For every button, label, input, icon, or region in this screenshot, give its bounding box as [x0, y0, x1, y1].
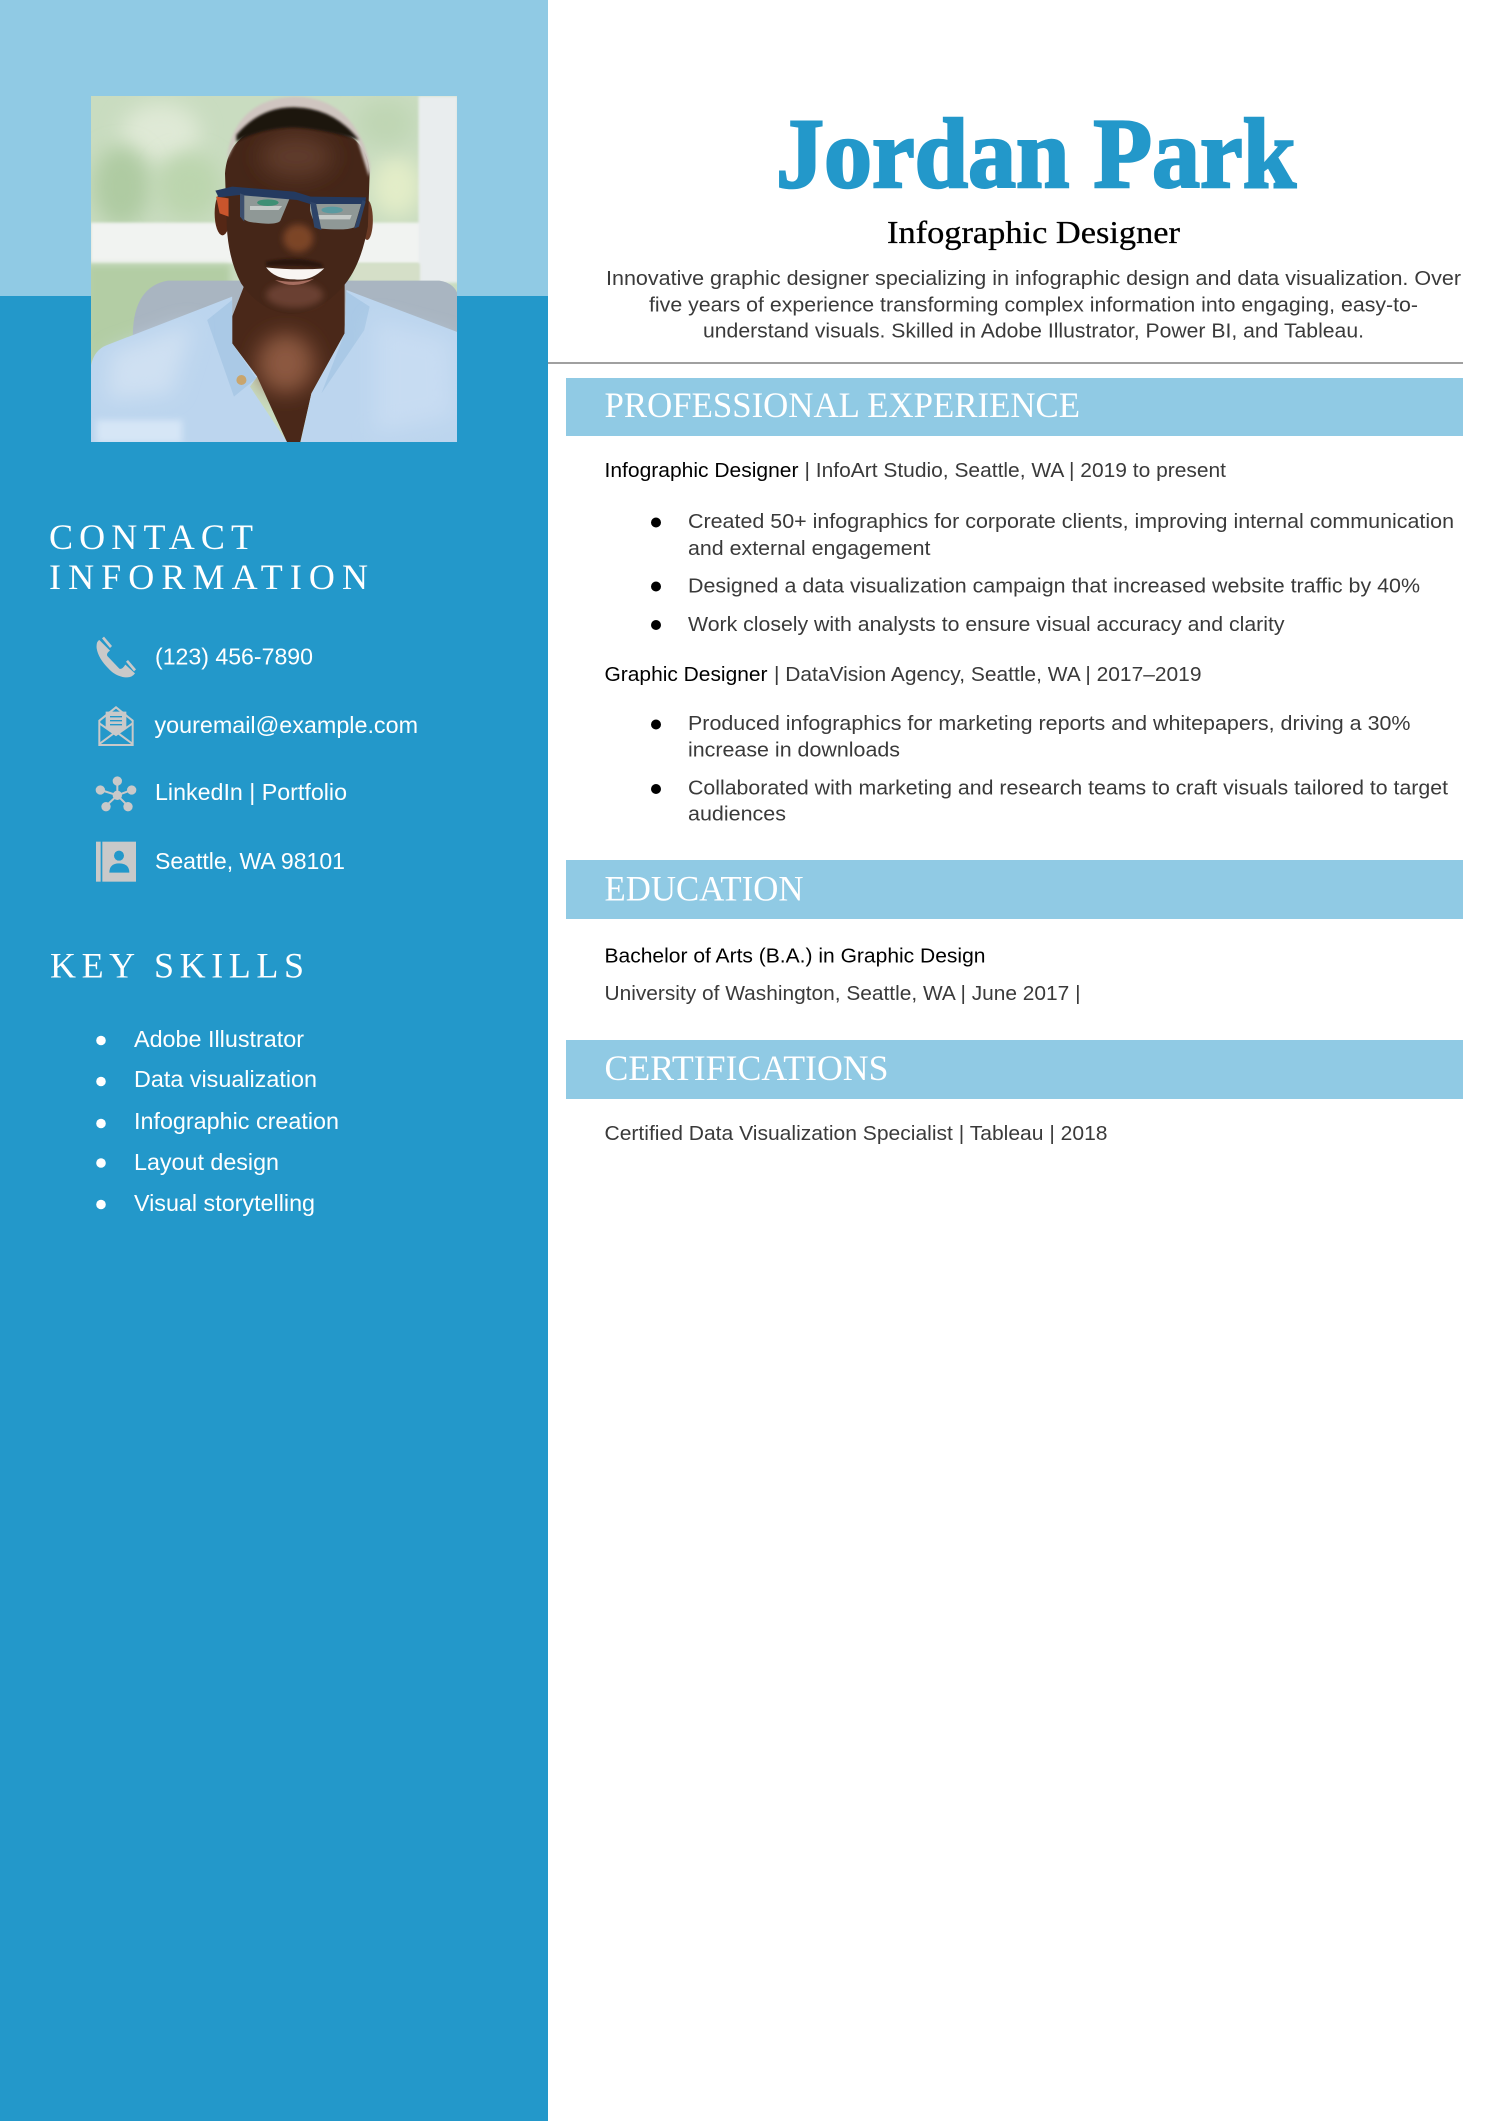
section heading: CERTIFICATIONS	[604, 1048, 888, 1088]
job 1 line	[604, 459, 1226, 482]
job 1 bullets: Designed a data visualization campaign that increased website traffic by 40%	[688, 574, 1420, 598]
job 1 bullets: and external engagement	[688, 537, 931, 560]
contact list	[96, 637, 418, 882]
heading: contact information: CONTACT	[49, 517, 253, 557]
job 2 line: | DataVision Agency, Seattle, WA | 2017–2019	[774, 663, 1202, 686]
list: key skills	[96, 1026, 339, 1216]
text block: professional summary	[606, 267, 1461, 342]
portrait photo	[87, 96, 461, 445]
subtitle: job title: Infographic Designer	[887, 214, 1180, 250]
section banner	[566, 1040, 1463, 1099]
job 1 bullets: Created 50+ infographics for corporate clients, improving internal communication	[688, 510, 1454, 533]
icon: phone	[97, 637, 136, 677]
icon: contact book	[96, 842, 136, 882]
heading: contact information	[49, 517, 368, 597]
job 2 bullets: increase in downloads	[688, 738, 900, 762]
sidebar dark blue column	[0, 0, 548, 2121]
text block: professional summary: Innovative graphic designer specializing in infographic design and data visualization. Over	[606, 267, 1461, 290]
list: key skills: Visual storytelling	[134, 1190, 315, 1216]
job 2 bullets	[651, 712, 1448, 826]
text block: professional summary: understand visuals. Skilled in Adobe Illustrator, Power BI, and Tableau.	[703, 320, 1364, 342]
icon: network	[96, 776, 136, 811]
phone number: (123) 456-7890	[155, 644, 313, 670]
text block: professional summary: five years of experience transforming complex information into engaging, easy-to-	[649, 294, 1418, 316]
job 2 bullets: Collaborated with marketing and research teams to craft visuals tailored to target	[688, 776, 1448, 800]
title: name: Jordan Park	[776, 98, 1296, 209]
panel: left sidebar	[0, 0, 548, 2121]
degree: Bachelor of Arts (B.A.) in Graphic Design	[604, 944, 986, 968]
heading: key skills: KEY SKILLS	[50, 946, 304, 986]
section heading: EDUCATION	[604, 868, 804, 908]
job 2 line: Graphic Designer	[604, 663, 768, 686]
job 2 bullets: Produced infographics for marketing reports and whitepapers, driving a 30%	[688, 712, 1410, 735]
job 2 bullets: audiences	[688, 802, 786, 826]
icon: open envelope	[99, 707, 133, 745]
linkedin and portfolio: LinkedIn | Portfolio	[155, 779, 347, 805]
list: key skills: Data visualization	[134, 1066, 317, 1092]
job 1 line: | InfoArt Studio, Seattle, WA | 2019 to present	[804, 459, 1226, 482]
email address: youremail@example.com	[154, 712, 418, 738]
job 1 bullets: Work closely with analysts to ensure visual accuracy and clarity	[688, 613, 1285, 636]
sidebar light blue header band	[0, 0, 548, 296]
job 1 line: Infographic Designer	[604, 459, 799, 482]
list: key skills: Adobe Illustrator	[134, 1026, 304, 1052]
section: certifications	[566, 1040, 1463, 1145]
heading: contact information: INFORMATION	[49, 557, 368, 597]
section banner	[566, 860, 1463, 919]
section heading: PROFESSIONAL EXPERIENCE	[604, 385, 1080, 425]
section: professional experience	[566, 378, 1463, 826]
section banner	[566, 378, 1463, 436]
list: key skills: Layout design	[134, 1149, 279, 1175]
list: key skills: Infographic creation	[134, 1108, 339, 1134]
section: education	[566, 860, 1463, 1005]
certification: Certified Data Visualization Specialist | Tableau | 2018	[604, 1122, 1108, 1145]
job 1 bullets	[651, 510, 1454, 636]
location: Seattle, WA 98101	[155, 848, 345, 874]
school: University of Washington, Seattle, WA | June 2017 |	[604, 982, 1080, 1005]
